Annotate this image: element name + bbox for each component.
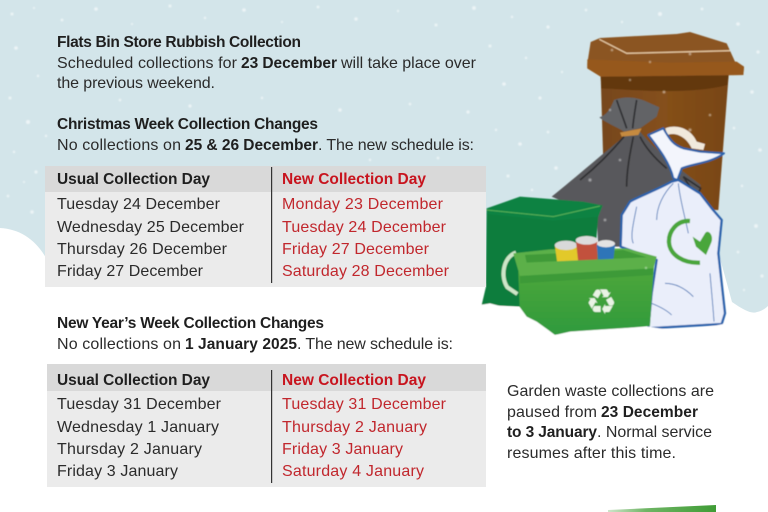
table: christmas week: Saturday 28 December (282, 263, 450, 280)
table: christmas week: Tuesday 24 December (57, 196, 221, 213)
table: new year's week: Usual Collection Day (57, 372, 210, 389)
table: new year's week: Tuesday 31 December (57, 396, 222, 413)
table: christmas week: Thursday 26 December (57, 241, 228, 258)
text block: garden waste notice: Garden waste collections are (507, 383, 714, 400)
table: christmas week: Tuesday 24 December (282, 219, 447, 236)
snow over illustration (588, 49, 711, 269)
text block: flats bin store rubbish collection: the previous weekend. (57, 75, 215, 92)
text block: garden waste notice: to 3 January (507, 424, 597, 441)
table: christmas week (45, 166, 486, 287)
icon: recycling symbol: ♻ (586, 283, 617, 323)
text block: flats bin store rubbish collection: will take place over (340, 55, 477, 72)
text block: flats bin store rubbish collection: Scheduled collections for (57, 55, 238, 72)
table: new year's week: Thursday 2 January (282, 419, 427, 436)
text block: new year's week changes: 1 January 2025 (185, 336, 297, 353)
text block: christmas week changes: . The new schedule is: (318, 137, 474, 154)
text block: flats bin store rubbish collection: Flats Bin Store Rubbish Collection (57, 34, 301, 51)
text block: new year's week changes (57, 315, 453, 353)
icon: cans (555, 236, 615, 263)
table: christmas week: Usual Collection Day (57, 171, 210, 188)
table: christmas week: Friday 27 December (282, 241, 430, 258)
green strip at page bottom (608, 505, 716, 512)
illustration: waste bins and bags (480, 32, 744, 340)
table: christmas week: Wednesday 25 December (57, 219, 245, 236)
text block: christmas week changes (57, 116, 474, 154)
text block: new year's week changes: New Year’s Week Collection Changes (57, 315, 324, 332)
snow at base of bins (480, 303, 727, 340)
table: new year's week: New Collection Day (282, 372, 426, 389)
text block: garden waste notice: . Normal service (597, 424, 712, 441)
text block: flats bin store rubbish collection (57, 34, 477, 92)
icon: black rubbish bag (552, 97, 701, 247)
text block: garden waste notice (507, 383, 714, 462)
table: new year's week: Friday 3 January (57, 463, 178, 480)
icon: green recycling box (513, 236, 657, 335)
icon: white recycling bag (621, 128, 725, 328)
table: christmas week: Monday 23 December (282, 196, 444, 213)
text block: christmas week changes: No collections on (57, 137, 181, 154)
table: new year's week: Friday 3 January (282, 441, 403, 458)
table: new year's week: Tuesday 31 December (282, 396, 447, 413)
text block: garden waste notice: resumes after this time. (507, 445, 676, 462)
text block: new year's week changes: No collections on (57, 336, 181, 353)
table: christmas week: New Collection Day (282, 171, 426, 188)
table: new year's week (47, 364, 486, 487)
icon: green wheelie bin (482, 197, 603, 307)
text block: garden waste notice: 23 December (601, 404, 698, 421)
text block: flats bin store rubbish collection: 23 December (241, 55, 337, 72)
table: new year's week: Wednesday 1 January (57, 419, 219, 436)
table: new year's week: Saturday 4 January (282, 463, 424, 480)
table: christmas week: Friday 27 December (57, 263, 204, 280)
falling snow (7, 4, 764, 291)
text block: garden waste notice: paused from (507, 404, 597, 421)
text block: christmas week changes: Christmas Week Collection Changes (57, 116, 318, 133)
icon: brown wheelie bin (587, 32, 744, 210)
background: snow drifts (0, 228, 768, 512)
text block: christmas week changes: 25 & 26 December (185, 137, 318, 154)
text block: new year's week changes: . The new schedule is: (297, 336, 453, 353)
table: new year's week: Thursday 2 January (57, 441, 202, 458)
